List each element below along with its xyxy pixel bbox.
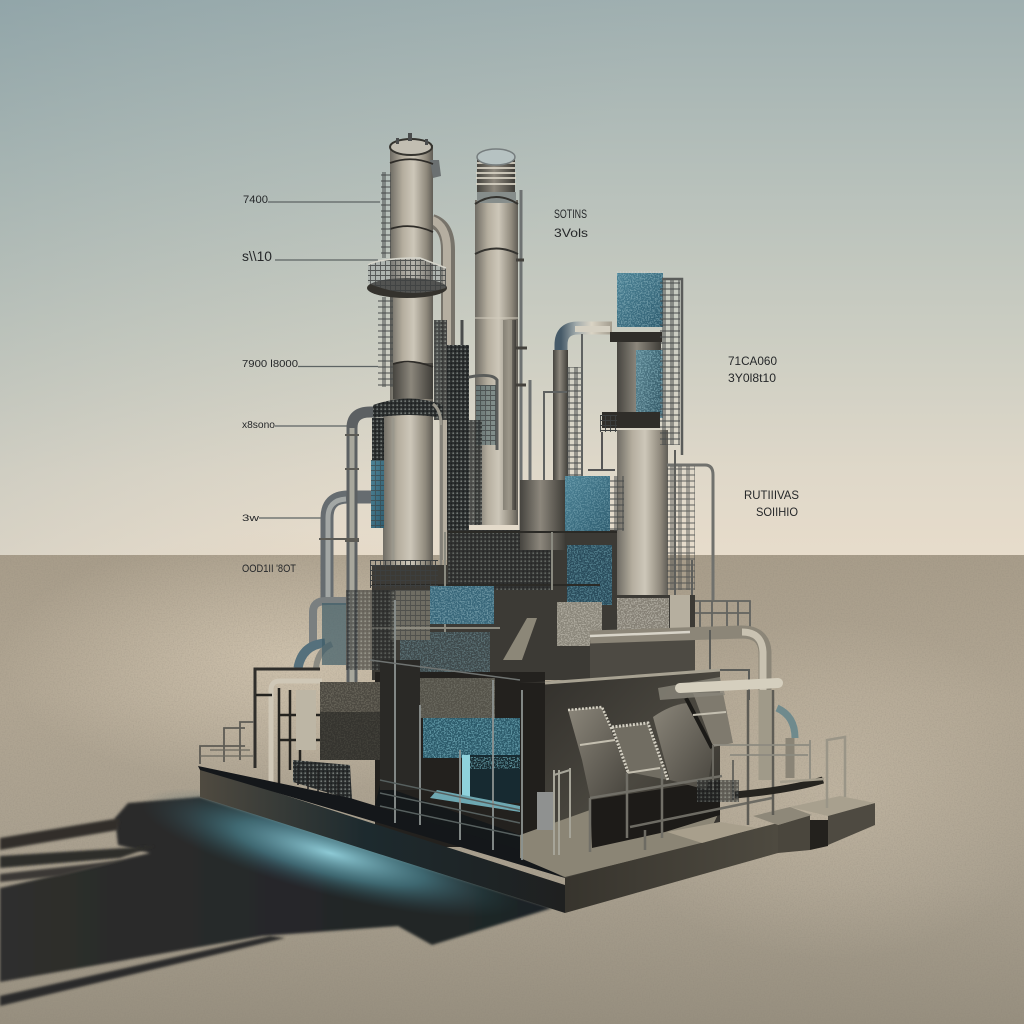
teal panel: [423, 718, 520, 758]
top teal mesh panel: [617, 272, 663, 327]
ladder lower: [378, 297, 393, 387]
upper central blocks: [370, 476, 695, 680]
label 1: [243, 194, 380, 206]
back pipe behind tower one: [432, 220, 462, 560]
left pipes: [298, 412, 388, 690]
label 4: x8sono: [242, 420, 275, 431]
sky background: [0, 0, 1024, 556]
label 9: RUTIIIVAS: [744, 488, 799, 502]
gallery platform: [367, 258, 447, 298]
plate three: [658, 677, 733, 748]
label 6: OOD1II '8OT: [242, 563, 296, 575]
label 9: SOIIHIO: [756, 505, 798, 519]
electrical box: [537, 768, 570, 855]
label 7: [554, 207, 588, 240]
label 8: 71CA060: [728, 354, 777, 368]
label 1: 7400: [243, 194, 268, 206]
ground plane: [0, 530, 1024, 1024]
right building block: [520, 670, 757, 878]
teal side screen: [371, 460, 384, 528]
left wing frame and rails: [200, 603, 346, 785]
label 9: [744, 488, 799, 519]
tower three: [544, 272, 713, 640]
label 3: [242, 359, 378, 370]
front glass railings: [370, 600, 522, 860]
label 8: [728, 354, 777, 385]
label 8: 3Y0l8t10: [728, 371, 776, 385]
scaffold and pipe: [667, 450, 713, 640]
plate one: [568, 707, 628, 797]
plate two: [612, 723, 668, 780]
left mesh block: [293, 660, 420, 800]
label 5: 3w: [242, 513, 260, 523]
tan floor plate: [667, 822, 757, 843]
tower two: [464, 149, 530, 560]
label 2: s\\10: [242, 248, 272, 264]
tower one: [367, 133, 447, 575]
glowing doorway: [430, 755, 520, 812]
base platform: [198, 766, 875, 913]
central dark block: [375, 672, 545, 852]
railing box: [695, 601, 750, 630]
label 7: SOTINS: [554, 207, 587, 221]
bent pipe: [561, 328, 612, 352]
label 2: [242, 248, 378, 264]
cast shadow with teal glow: [0, 762, 552, 1006]
mid mesh panels: [346, 586, 500, 682]
mesh collar: [373, 398, 443, 418]
slanted plates: [568, 677, 733, 797]
label 7: 3Vols: [554, 226, 588, 240]
ladder upper: [381, 172, 391, 258]
label 3: 7900 l8000: [242, 359, 298, 370]
right upper block and pipes: [557, 595, 765, 780]
right lower pipes and rails: [590, 683, 845, 852]
beaded mesh between towers: [434, 320, 482, 535]
dark curved hood: [653, 703, 713, 790]
callout labels: [242, 194, 799, 575]
label 4: [242, 420, 347, 431]
label 5: [242, 513, 321, 523]
upper horizontal pipe: [590, 632, 765, 780]
